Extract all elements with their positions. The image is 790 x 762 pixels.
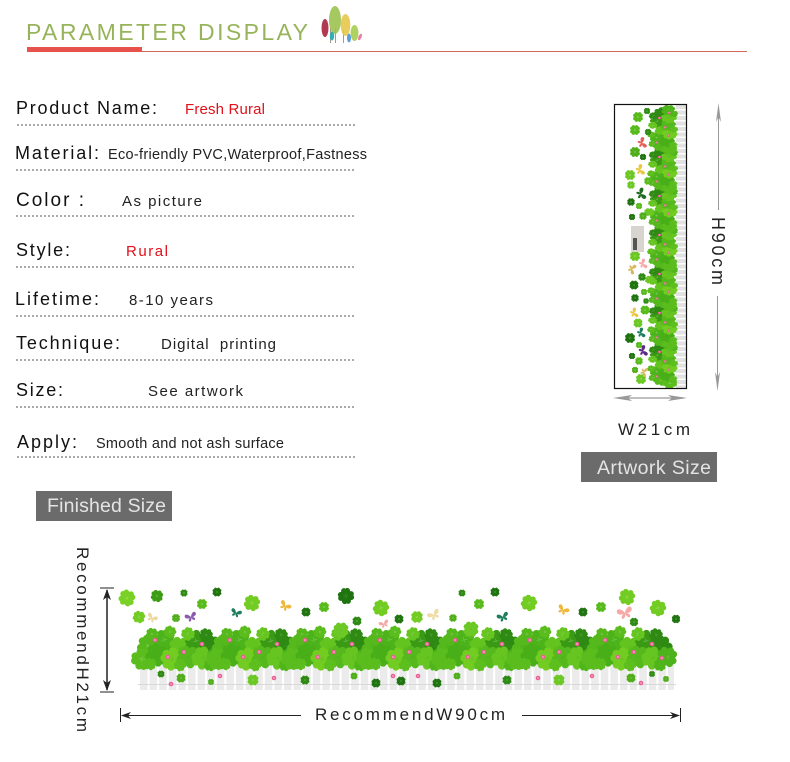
icon: watercolor trees xyxy=(322,6,363,43)
parameter: lifetime: 8-10 years xyxy=(129,292,213,309)
parameter: lifetime: Lifetime: xyxy=(15,289,99,309)
preview product label xyxy=(631,226,644,252)
parameter: technique: Technique: xyxy=(16,333,120,353)
parameter: color: As picture xyxy=(122,193,202,210)
clover hedge xyxy=(127,622,678,674)
clovers below hedge xyxy=(158,671,669,687)
parameter: lifetime xyxy=(15,289,356,316)
white picket fence xyxy=(138,662,676,690)
preview fence xyxy=(676,105,686,389)
height arrow: H90cm xyxy=(708,103,728,391)
preview scattered clovers xyxy=(625,108,652,384)
parameter: material xyxy=(15,143,367,170)
parameter: color xyxy=(16,190,356,216)
parameter: size: See artwork xyxy=(148,383,244,400)
finished artwork: clover fence xyxy=(117,585,680,690)
badge: finished size xyxy=(36,491,172,521)
recommended width arrow and label: RecommendW90cm xyxy=(315,705,505,724)
recommended width arrow and label xyxy=(120,705,680,724)
width arrow: W21cm: W21cm xyxy=(618,420,690,439)
width arrow: W21cm xyxy=(613,395,690,439)
parameter: material: Eco-friendly PVC,Waterproof,Fastness xyxy=(108,147,367,163)
badge: finished size: Finished Size xyxy=(47,495,166,517)
badge: artwork size: Artwork Size xyxy=(597,457,711,479)
butterflies xyxy=(145,599,634,629)
parameter: size xyxy=(16,380,356,407)
parameter: style: Style: xyxy=(16,240,70,260)
height arrow: H90cm: H90cm xyxy=(708,217,728,285)
parameter: size: Size: xyxy=(16,380,63,400)
parameter: product name xyxy=(16,98,356,125)
recommended height arrow xyxy=(100,588,114,692)
parameter: style: Rural xyxy=(126,243,168,260)
parameter: material: Material: xyxy=(15,143,99,163)
parameter: apply: Smooth and not ash surface xyxy=(96,436,284,452)
parameter: apply: Apply: xyxy=(17,432,77,452)
title underline xyxy=(27,47,747,52)
artwork size preview xyxy=(614,104,686,391)
title: PARAMETER DISPLAY xyxy=(26,19,308,45)
parameter: technique xyxy=(16,333,356,360)
recommended height label: RecommendH21cm xyxy=(73,547,92,732)
parameter: technique: Digital printing xyxy=(161,336,276,353)
preview hedge xyxy=(644,105,680,391)
badge: artwork size xyxy=(581,452,717,482)
parameter: apply xyxy=(17,432,356,457)
parameter: product name: Product Name: xyxy=(16,98,157,118)
parameter: style xyxy=(16,240,356,267)
parameter: color: Color : xyxy=(16,190,84,211)
scattered clovers xyxy=(117,585,680,626)
preview butterflies xyxy=(627,137,648,377)
parameter: product name: Fresh Rural xyxy=(185,101,265,118)
